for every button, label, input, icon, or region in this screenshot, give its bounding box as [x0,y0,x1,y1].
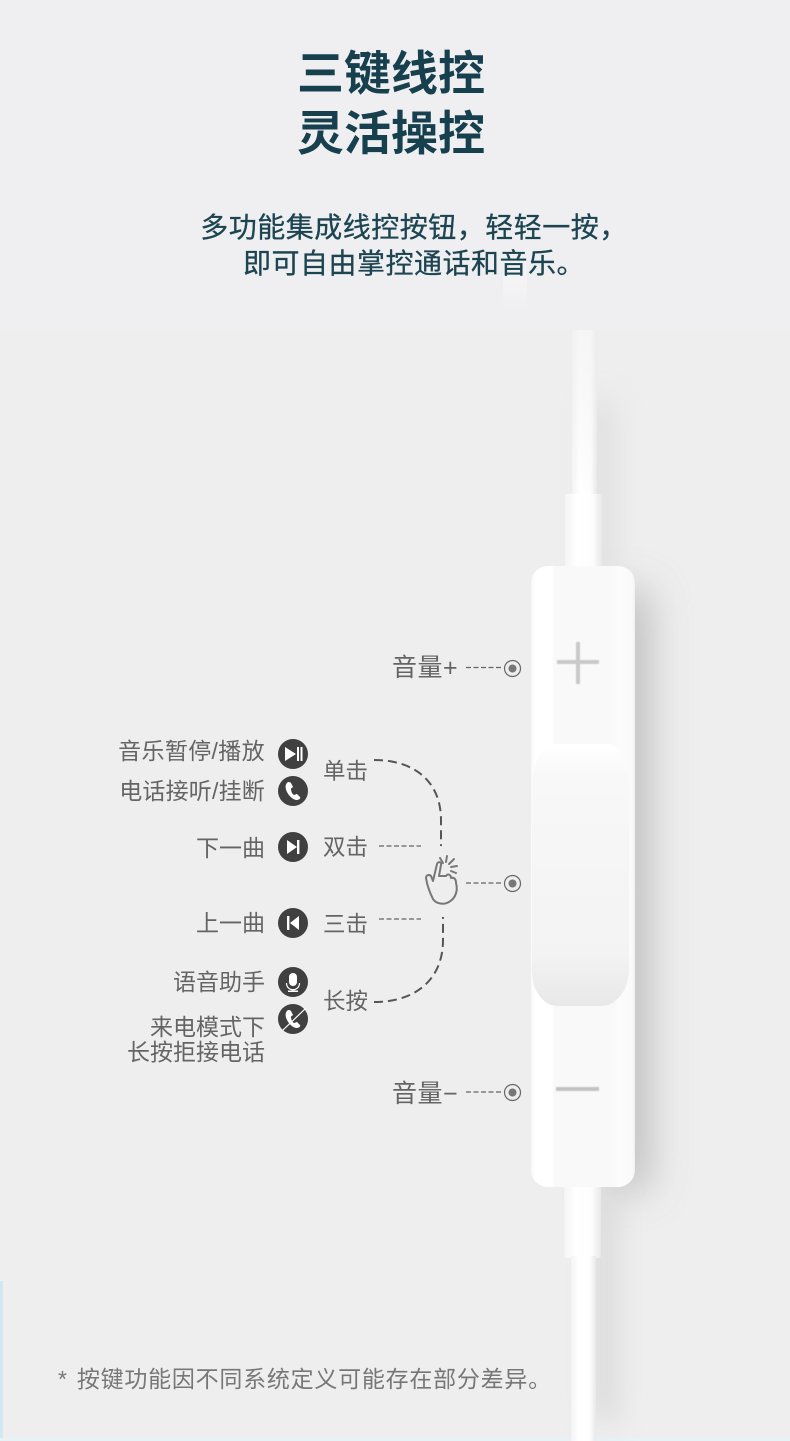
footnote: * 按键功能因不同系统定义可能存在部分差异。 [58,1366,552,1392]
label: previous track: 上一曲 [196,910,265,936]
label: answer hang up: 电话接听/挂断 [119,778,265,804]
centre button [532,744,629,1006]
single click connector [374,760,441,846]
label: double click: 双击 [323,835,368,860]
header background band [0,0,790,330]
icon: previous track [278,908,308,938]
label: volume up: 音量+ [392,654,458,682]
icon: play pause [278,739,308,769]
label: voice assistant: 语音助手 [173,969,265,995]
double click dashes [379,845,421,847]
icon: phone [278,776,308,806]
lower collar [564,1185,601,1258]
upper cable [572,330,597,500]
label: long press: 长按 [323,989,368,1014]
upper collar [565,494,602,568]
left edge tint [0,1281,3,1441]
label: triple click: 三击 [323,912,368,937]
label: reject call: 长按拒接电话 [127,1039,265,1065]
subtitle: 多功能集成线控按钮，轻轻一按， [200,212,628,243]
action labels [118,738,368,1065]
label: single click: 单击 [323,759,368,784]
icon: next track [278,832,308,862]
icon: tapping hand [426,856,457,904]
label: reject call: 来电模式下 [150,1014,265,1040]
label: volume down: 音量− [392,1080,458,1108]
remote body [531,566,635,1187]
triple click dashes [379,918,421,920]
minus mark [556,1087,599,1091]
lower cable [571,1256,596,1441]
subtitle: 即可自由掌控通话和音乐。 [243,248,585,279]
plus mark [557,642,599,684]
centre button leader [466,876,520,892]
label: reject call [127,1014,265,1065]
label: next track: 下一曲 [196,835,265,861]
title: 三键线控 [297,47,485,100]
label: music pause play: 音乐暂停/播放 [118,738,265,764]
icon: phone crossed [278,1004,308,1034]
volume down leader [466,1084,520,1100]
bottom edge tint [0,1438,790,1441]
title [297,47,485,160]
earphone shadow [592,400,650,1420]
title: 灵活操控 [297,107,485,160]
ghost cable reflection [503,250,527,310]
icon: microphone [278,967,308,997]
long press connector [374,917,443,1002]
subtitle [200,212,628,279]
volume up leader [466,660,520,676]
